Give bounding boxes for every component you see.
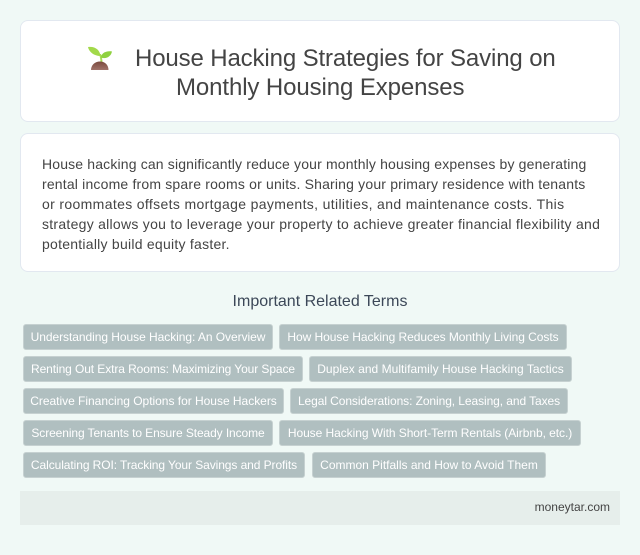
tag [23, 356, 303, 382]
tag [312, 452, 546, 478]
tag [23, 452, 305, 478]
tag [309, 356, 572, 382]
tag [279, 420, 581, 446]
tag: Creative Financing Options for House Hackers [30, 394, 277, 408]
text block: summary paragraph: House hacking can significantly reduce your monthly housing expenses by generating [42, 156, 586, 172]
text block: summary paragraph: rental income from spare rooms or units. Sharing your primary residence with tenants [42, 176, 585, 192]
text block: summary paragraph: or roommates offsets mortgage payments, utilities, and maintenance costs. This [42, 196, 564, 212]
tag [279, 324, 567, 350]
tag: Duplex and Multifamily House Hacking Tactics [317, 362, 564, 376]
title: House Hacking Strategies for Saving on [135, 45, 556, 72]
tag [23, 388, 284, 414]
tag: Screening Tenants to Ensure Steady Income [31, 426, 265, 440]
tag: Renting Out Extra Rooms: Maximizing Your Space [31, 362, 295, 376]
panel: title card [20, 20, 620, 122]
icon: seedling [88, 46, 112, 70]
tag [23, 324, 273, 350]
tag: How House Hacking Reduces Monthly Living Costs [287, 330, 559, 344]
tag [290, 388, 568, 414]
tag [23, 420, 273, 446]
panel: related term tags [23, 324, 581, 478]
text block: summary paragraph [42, 156, 600, 252]
tag: Understanding House Hacking: An Overview [31, 330, 265, 344]
title: Monthly Housing Expenses [176, 74, 464, 101]
tag: Legal Considerations: Zoning, Leasing, and Taxes [298, 394, 560, 408]
text block: summary paragraph: strategy allows you to leverage your property to achieve greater financial flexibility and [42, 216, 600, 232]
tag: Calculating ROI: Tracking Your Savings and Profits [31, 458, 297, 472]
text block: summary paragraph: potentially build equity faster. [42, 236, 230, 252]
heading: related terms: Important Related Terms [233, 293, 407, 310]
footer source text: moneytar.com [535, 500, 610, 514]
tag: House Hacking With Short-Term Rentals (Airbnb, etc.) [288, 426, 572, 440]
footer bar [20, 491, 620, 525]
tag: Common Pitfalls and How to Avoid Them [320, 458, 538, 472]
panel: summary text [20, 133, 620, 272]
title [135, 45, 556, 101]
